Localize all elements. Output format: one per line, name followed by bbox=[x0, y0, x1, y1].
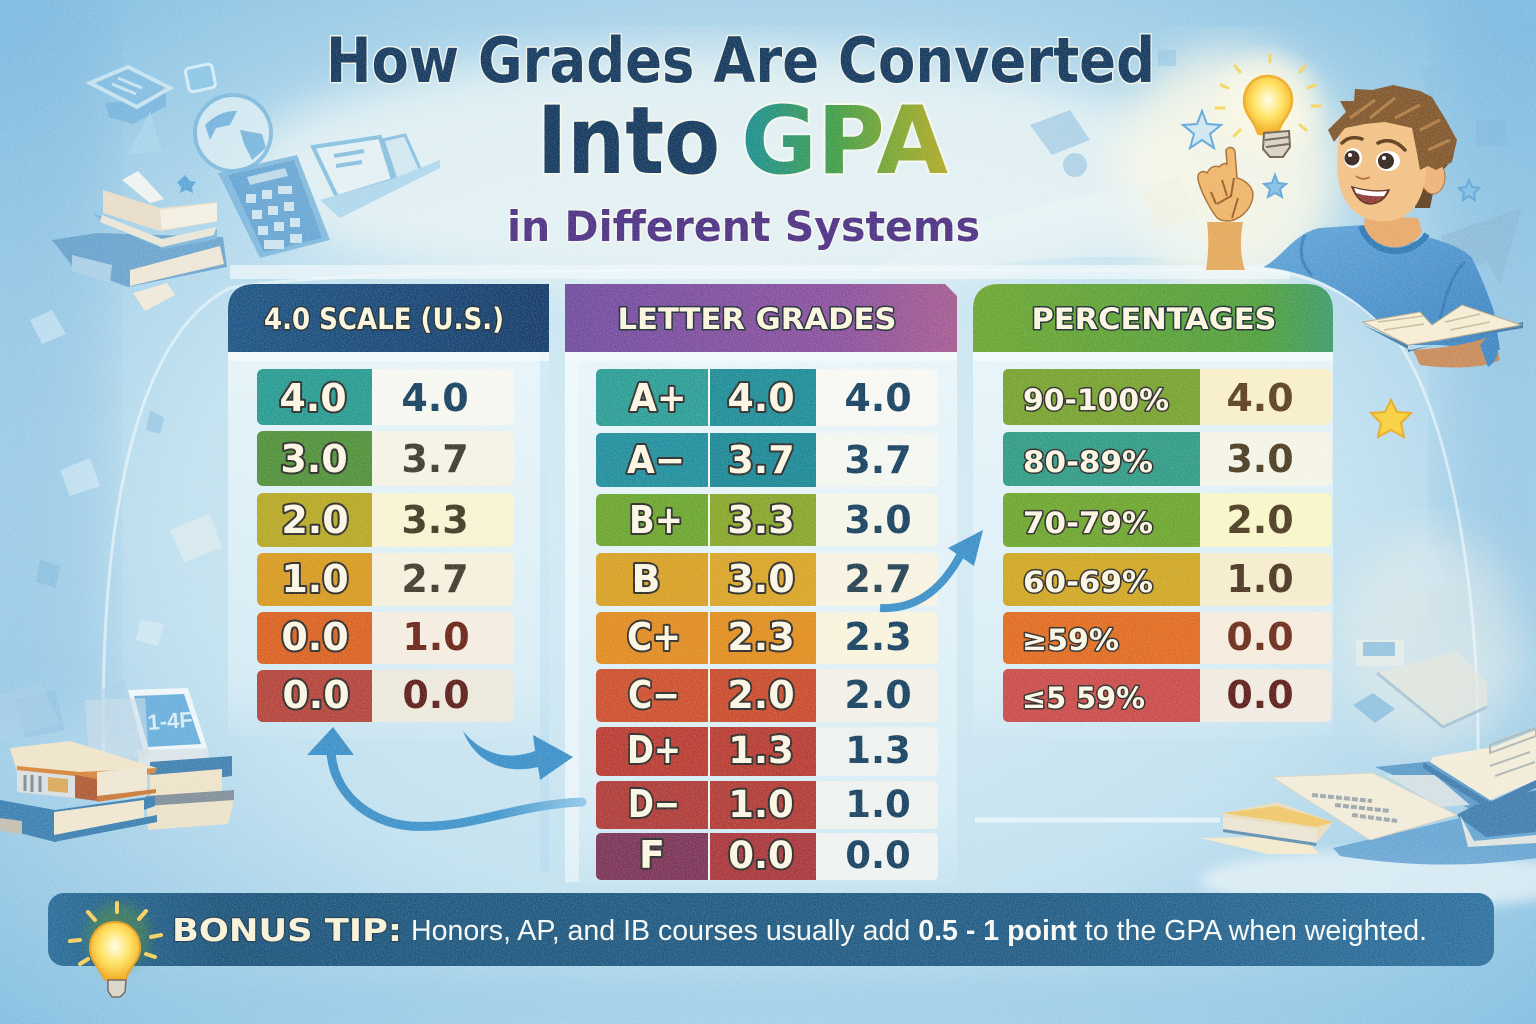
eyes bbox=[1342, 138, 1405, 171]
laptop: 1-4F bbox=[147, 707, 193, 735]
row: 1.0 to 2.7: 1.0 bbox=[281, 557, 349, 601]
title line 2: Into bbox=[537, 87, 720, 196]
row: D- bbox=[596, 781, 938, 829]
row: F: 0.0 bbox=[728, 834, 794, 877]
row: 3.0 to 3.7 bbox=[257, 431, 514, 486]
arrow: up to percentages bbox=[880, 530, 983, 608]
row: F: 0.0 bbox=[845, 834, 911, 877]
row: B+: 3.3 bbox=[727, 498, 795, 542]
neck bbox=[1364, 215, 1422, 247]
row: 4.0 to 4.0: 4.0 bbox=[279, 376, 347, 420]
row: D-: 1.0 bbox=[728, 783, 794, 826]
row: A-: A− bbox=[627, 438, 685, 482]
faded book stack bbox=[52, 171, 227, 311]
row: 0.0 to 1.0 bbox=[257, 612, 514, 664]
row: F bbox=[596, 833, 938, 880]
faded back doodles bbox=[0, 680, 137, 748]
row: 1.0 to 2.7 bbox=[257, 553, 514, 606]
row: C- bbox=[596, 669, 938, 722]
collar bbox=[1361, 226, 1427, 251]
hair bbox=[1328, 85, 1457, 170]
row: at or above 59%: ≥59% bbox=[1022, 623, 1119, 657]
title bbox=[326, 24, 1155, 251]
lower blue book bbox=[1375, 761, 1495, 811]
row: 90-100%: 4.0 bbox=[1226, 376, 1294, 420]
row: 0.0 to 1.0: 1.0 bbox=[402, 615, 470, 659]
flat page bbox=[1272, 773, 1457, 840]
row: 4.0 to 4.0 bbox=[257, 369, 514, 425]
laptop bbox=[85, 688, 209, 765]
calculator bbox=[218, 155, 330, 258]
header: letter grades bbox=[565, 284, 957, 352]
row: 4.0 to 4.0: 4.0 bbox=[401, 376, 469, 420]
panel: 4.0 scale bbox=[228, 284, 549, 872]
bonus tip bar bbox=[48, 893, 1494, 997]
icon: lower right open books bbox=[1200, 728, 1536, 910]
icon: small blue stars bbox=[1183, 111, 1479, 200]
pointing fist bbox=[1198, 148, 1253, 221]
row: 70-79%: 70-79% bbox=[1023, 506, 1153, 540]
title line 2: GPA bbox=[741, 87, 948, 196]
header: letter grades: LETTER GRADES bbox=[618, 302, 896, 336]
row: 3.0 to 3.7: 3.0 bbox=[280, 437, 348, 481]
row: at or below 59% bbox=[1003, 669, 1331, 722]
row: C-: 2.0 bbox=[844, 673, 912, 717]
row: at or above 59% bbox=[1003, 612, 1331, 664]
mouth bbox=[1352, 187, 1389, 204]
open book bbox=[1363, 305, 1523, 367]
nose bbox=[1356, 176, 1370, 179]
row: C+: 2.3 bbox=[727, 615, 795, 659]
faded doodles: mid left bbox=[15, 310, 222, 738]
row: A+: A+ bbox=[630, 376, 686, 420]
row: 1.0 to 2.7: 2.7 bbox=[401, 557, 469, 601]
row: D+: D+ bbox=[627, 728, 681, 772]
header: 4.0 scale: 4.0 SCALE (U.S.) bbox=[264, 302, 504, 336]
row: 0.0 to 0.0 bbox=[257, 670, 514, 722]
row: C+: C+ bbox=[627, 615, 681, 659]
row: A+: 4.0 bbox=[727, 376, 795, 420]
row: 60-69%: 60-69% bbox=[1023, 565, 1153, 599]
right pair of books bbox=[150, 756, 232, 786]
shirt bbox=[1263, 225, 1500, 350]
row: 90-100%: 90-100% bbox=[1023, 383, 1169, 417]
icon: gold star bbox=[1371, 400, 1411, 437]
row: 80-89%: 80-89% bbox=[1023, 445, 1153, 479]
row: D-: 1.0 bbox=[845, 783, 911, 826]
header: 4.0 scale bbox=[228, 284, 549, 352]
bonus tip text: Honors, AP, and IB courses usually add 0.5 - 1 point to the GPA when weighted. bbox=[411, 915, 1427, 947]
faded screens bbox=[313, 135, 440, 218]
row: at or above 59%: 0.0 bbox=[1226, 615, 1294, 659]
faded doodles: upper right bbox=[870, 50, 1522, 284]
row: 0.0 to 0.0: 0.0 bbox=[282, 673, 350, 717]
row: D+: 1.3 bbox=[728, 729, 794, 772]
row: F: F bbox=[639, 833, 665, 877]
ear bbox=[1421, 160, 1445, 194]
row: C-: 2.0 bbox=[727, 673, 795, 717]
icon: glowing light bulb bbox=[1206, 43, 1330, 167]
row: 0.0 to 0.0: 0.0 bbox=[402, 673, 470, 717]
arrow: up to the 4.0 scale bbox=[307, 727, 582, 826]
faded doodles: upper left school icons bbox=[52, 63, 440, 311]
row: 80-89%: 3.0 bbox=[1226, 437, 1294, 481]
row: A-: 3.7 bbox=[727, 438, 795, 482]
row: at or below 59%: 0.0 bbox=[1226, 673, 1294, 717]
bonus tip label: BONUS TIP: bbox=[172, 913, 402, 949]
small icon tile bbox=[185, 63, 216, 92]
row: B bbox=[596, 553, 938, 606]
title line 2 bbox=[537, 87, 948, 196]
row: 90-100% bbox=[1003, 369, 1331, 425]
header: percentages: PERCENTAGES bbox=[1032, 302, 1276, 336]
row: 2.0 to 3.3 bbox=[257, 493, 514, 547]
row: 2.0 to 3.3: 2.0 bbox=[281, 498, 349, 542]
header: percentages bbox=[973, 284, 1333, 352]
row: C-: C− bbox=[628, 673, 680, 717]
title line 1: How Grades Are Converted bbox=[326, 24, 1155, 97]
face bbox=[1337, 112, 1427, 221]
row: C+: 2.3 bbox=[844, 615, 912, 659]
row: 70-79% bbox=[1003, 493, 1331, 547]
graduation cap bbox=[90, 67, 170, 154]
row: A+ bbox=[596, 369, 938, 426]
row: B+: 3.0 bbox=[844, 498, 912, 542]
row: C+ bbox=[596, 612, 938, 664]
faded doodles: mid and lower right bbox=[1353, 550, 1487, 727]
row: D+: 1.3 bbox=[845, 729, 911, 772]
small book bbox=[1200, 836, 1320, 854]
row: B: B bbox=[632, 557, 660, 601]
title line 3: in Different Systems bbox=[507, 202, 980, 251]
arrow: right to letter grades bbox=[463, 731, 573, 780]
row: B+: B+ bbox=[629, 498, 683, 542]
illustration: boy pointing with a book bbox=[1198, 85, 1523, 367]
panel: percentages bbox=[973, 284, 1333, 740]
row: 80-89% bbox=[1003, 432, 1331, 486]
row: at or below 59%: ≤5 59% bbox=[1022, 681, 1145, 715]
row: B: 3.0 bbox=[727, 557, 795, 601]
row: 70-79%: 2.0 bbox=[1226, 498, 1294, 542]
row: A+: 4.0 bbox=[844, 376, 912, 420]
row: 3.0 to 3.7: 3.7 bbox=[401, 437, 469, 481]
row: B+ bbox=[596, 494, 938, 546]
arch behind the tables bbox=[103, 270, 1478, 820]
row: B: 2.7 bbox=[844, 557, 912, 601]
raised arm bbox=[1206, 222, 1245, 270]
back hair bbox=[1415, 160, 1452, 208]
row: D+ bbox=[596, 727, 938, 776]
row: A- bbox=[596, 433, 938, 487]
icon: lower left book stack and laptop bbox=[0, 680, 234, 842]
orange book bbox=[10, 741, 157, 778]
icon: bonus bulb bbox=[70, 903, 161, 997]
row: A-: 3.7 bbox=[844, 438, 912, 482]
row: 60-69%: 1.0 bbox=[1226, 557, 1294, 601]
panel: letter grades bbox=[565, 284, 957, 885]
open book right bbox=[1423, 762, 1536, 810]
row: 2.0 to 3.3: 3.3 bbox=[401, 498, 469, 542]
blue book bbox=[0, 796, 155, 842]
globe bbox=[195, 95, 271, 171]
row: 60-69% bbox=[1003, 553, 1331, 606]
row: 0.0 to 1.0: 0.0 bbox=[281, 615, 349, 659]
row: D-: D− bbox=[628, 782, 680, 826]
